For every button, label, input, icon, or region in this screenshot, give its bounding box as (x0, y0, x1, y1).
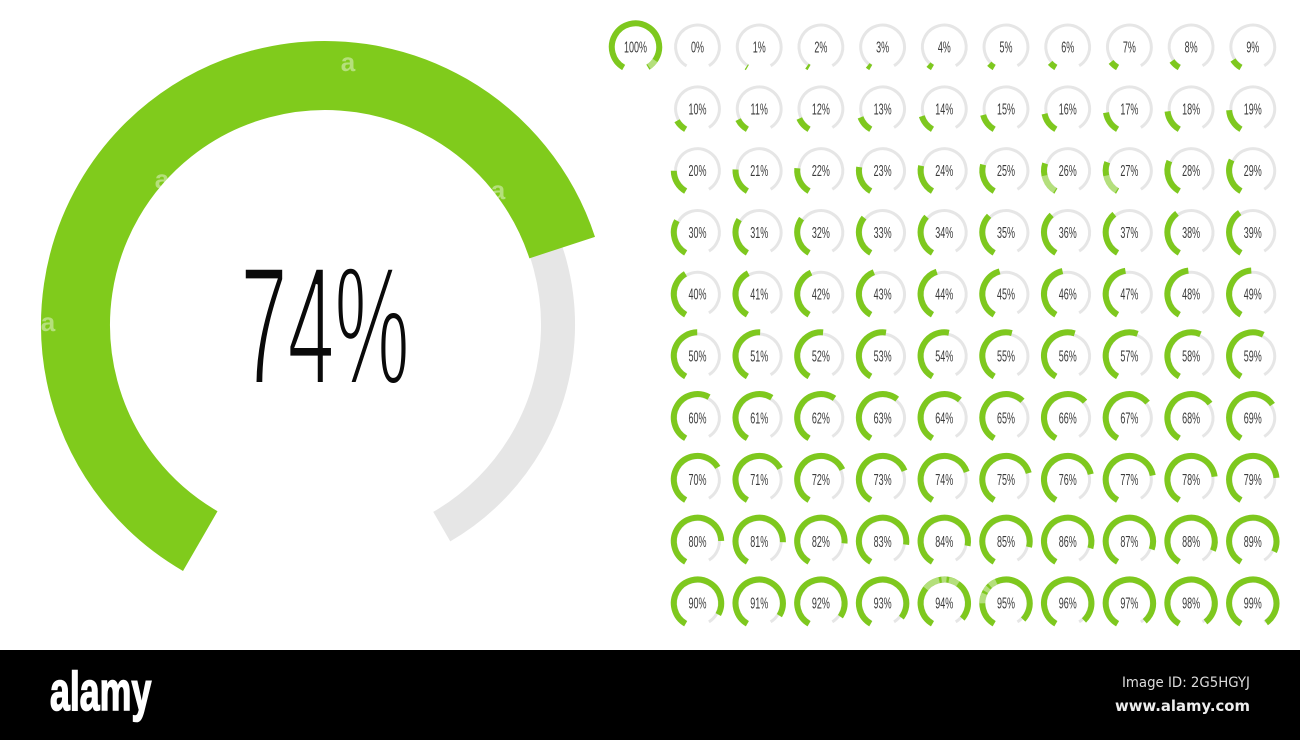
gauge: 74%: 74% (935, 472, 953, 489)
gauge: 39%: 39% (1244, 224, 1262, 242)
main gauge: 74%: a (155, 164, 170, 194)
gauge: 50%: 50% (689, 348, 706, 365)
gauge: 60% (665, 385, 730, 450)
gauge: 63% (850, 385, 915, 450)
gauge: 54% (912, 324, 977, 388)
main gauge: 74%: a (491, 175, 506, 205)
gauge: 26%: 26% (1059, 163, 1077, 180)
gauge: 51% (727, 324, 792, 388)
gauge: 97%: 97% (1120, 595, 1138, 612)
gauge: 35%: 35% (997, 224, 1015, 242)
gauge: 17%: 17% (1120, 101, 1138, 118)
gauge: 98% (1159, 571, 1223, 636)
gauge: 5% (974, 15, 1038, 79)
gauge: 25%: 25% (997, 163, 1015, 180)
gauge: 77% (1097, 447, 1162, 512)
gauge: 69%: 69% (1244, 410, 1262, 427)
gauge: 80%: 80% (689, 533, 706, 551)
gauge: 22%: 22% (812, 163, 830, 180)
gauge: 34%: 34% (935, 224, 953, 242)
gauge: 90% (665, 571, 730, 636)
gauge: 55%: 55% (997, 348, 1015, 365)
gauge: 7% (1097, 15, 1162, 79)
gauge: 4%: 4% (938, 39, 951, 56)
gauge: 35% (974, 200, 1038, 265)
gauge: 72%: 72% (812, 472, 830, 489)
image id: Image ID: 2G5HGYJ (1122, 675, 1250, 691)
gauge: 39% (1220, 200, 1285, 265)
gauge: 49% (1220, 262, 1285, 327)
gauge: 12%: 12% (812, 101, 830, 118)
gauge: 56%: 56% (1059, 348, 1077, 365)
gauge: 80% (665, 509, 730, 574)
gauge: 94% (912, 571, 977, 636)
gauge: 58% (1159, 324, 1223, 388)
gauge: 92% (789, 571, 853, 636)
gauge: 91% (727, 571, 792, 636)
gauge: 79% (1220, 447, 1285, 512)
gauge: 30% (665, 200, 730, 265)
gauge: 33%: 33% (874, 224, 892, 242)
gauge: 75% (974, 447, 1038, 512)
gauge: 19% (1220, 76, 1285, 141)
gauge: 45% (974, 262, 1038, 327)
gauge: 53% (850, 324, 915, 388)
gauge: 72% (789, 447, 853, 512)
gauge: 66% (1035, 385, 1100, 450)
gauge: 6%: 6% (1061, 39, 1074, 56)
gauge: 94%: 94% (935, 595, 953, 612)
gauge: 90%: 90% (689, 595, 706, 612)
main gauge: 74%: a (41, 307, 56, 337)
main gauge: 74% (0, 0, 666, 666)
alamy logo: alamy (50, 660, 152, 722)
gauge: 87%: 87% (1120, 533, 1138, 551)
gauge: 98%: 98% (1182, 595, 1200, 612)
gauge: 23% (850, 138, 915, 203)
gauge: 2%: 2% (814, 39, 827, 56)
gauge: 9% (1220, 15, 1285, 79)
main gauge: 74%: a (341, 47, 356, 77)
gauge: 83%: 83% (874, 533, 892, 551)
gauge: 75%: 75% (997, 472, 1015, 489)
gauge: 15% (974, 76, 1038, 141)
footer bar (0, 650, 1300, 740)
gauge: 70%: 70% (689, 472, 706, 489)
gauge: 15%: 15% (997, 101, 1015, 118)
gauge: 29%: 29% (1244, 163, 1262, 180)
gauge: 2% (789, 15, 853, 79)
gauge: 44% (912, 262, 977, 327)
gauge: 63%: 63% (874, 410, 892, 427)
gauge: 18%: 18% (1182, 101, 1200, 118)
gauge: 73%: 73% (874, 472, 892, 489)
gauge: 82%: 82% (812, 533, 830, 551)
gauge: 67% (1097, 385, 1162, 450)
gauge: 66%: 66% (1059, 410, 1077, 427)
gauge: 88% (1159, 509, 1223, 574)
gauge: 68% (1159, 385, 1223, 450)
gauge: 74% (912, 447, 977, 512)
gauge: 96%: 96% (1059, 595, 1077, 612)
gauge: 32% (789, 200, 853, 265)
gauge: 89% (1220, 509, 1285, 574)
gauge: 61% (727, 385, 792, 450)
gauge: 61%: 61% (750, 410, 768, 427)
gauge: 48%: 48% (1182, 286, 1200, 303)
gauge: 91%: 91% (750, 595, 768, 612)
gauge: 95% (974, 571, 1038, 636)
gauge: 36% (1035, 200, 1100, 265)
gauge: 52% (789, 324, 853, 388)
gauge: 13%: 13% (874, 101, 892, 118)
gauge: 46% (1035, 262, 1100, 327)
gauge: 78%: 78% (1182, 472, 1200, 489)
gauge: 100% (603, 15, 668, 79)
gauge: 69% (1220, 385, 1285, 450)
gauge: 11% (727, 76, 792, 141)
gauge: 38%: 38% (1182, 224, 1200, 242)
gauge: 85%: 85% (997, 533, 1015, 551)
gauge: 19%: 19% (1244, 101, 1262, 118)
gauge: 9%: 9% (1246, 39, 1259, 56)
gauge: 0% (668, 17, 727, 77)
gauge: 41% (727, 262, 792, 327)
gauge: 64%: 64% (935, 410, 953, 427)
gauge: 43%: 43% (874, 286, 892, 303)
gauge: 48% (1159, 262, 1223, 327)
gauge: 40% (665, 262, 730, 327)
gauge: 60%: 60% (689, 410, 706, 427)
gauge: 25% (974, 138, 1038, 203)
gauge: 45%: 45% (997, 286, 1015, 303)
gauge: 99% (1220, 571, 1285, 636)
gauge: 21%: 21% (750, 163, 768, 180)
gauge: 86%: 86% (1059, 533, 1077, 551)
gauge: 40%: 40% (689, 286, 706, 303)
gauge: 28% (1159, 138, 1223, 203)
gauge: 53%: 53% (874, 348, 892, 365)
gauge: 31%: 31% (750, 224, 768, 242)
gauge: 12% (789, 76, 853, 141)
gauge: 88%: 88% (1182, 533, 1200, 551)
gauge: 50% (665, 324, 730, 388)
gauge: 42% (789, 262, 853, 327)
gauge: 8%: 8% (1185, 39, 1198, 56)
gauge: 10%: 10% (689, 101, 706, 118)
gauge: 23%: 23% (874, 163, 892, 180)
gauge: 18% (1159, 76, 1223, 141)
gauge: 86% (1035, 509, 1100, 574)
gauge: 57% (1097, 324, 1162, 388)
gauge: 73% (850, 447, 915, 512)
gauge: 10% (665, 76, 730, 141)
gauge: 3% (850, 15, 915, 79)
gauge: 62% (789, 385, 853, 450)
gauge: 5%: 5% (1000, 39, 1012, 56)
gauge: 59%: 59% (1244, 348, 1262, 365)
gauge: 47%: 47% (1120, 286, 1138, 303)
gauge: 14%: 14% (935, 101, 953, 118)
gauge: 93% (850, 571, 915, 636)
gauge: 65% (974, 385, 1038, 450)
gauge: 44%: 44% (935, 286, 953, 303)
gauge: 55% (974, 324, 1038, 388)
gauge: 22% (789, 138, 853, 203)
gauge: 76% (1035, 447, 1100, 512)
gauge: 85% (974, 509, 1038, 574)
gauge: 54%: 54% (935, 348, 953, 365)
gauge: 34% (912, 200, 977, 265)
gauge: 24%: 24% (935, 163, 953, 180)
gauge: 20% (665, 138, 730, 203)
gauge: 83% (850, 509, 915, 574)
gauge: 16% (1035, 76, 1100, 141)
gauge: 31% (727, 200, 792, 265)
gauge: 42%: 42% (812, 286, 830, 303)
gauge: 47% (1097, 262, 1162, 327)
gauge: 38% (1159, 200, 1223, 265)
gauge: 71%: 71% (750, 472, 768, 489)
gauge: 79%: 79% (1244, 472, 1262, 489)
gauge: 71% (727, 447, 792, 512)
gauge: 11%: 11% (751, 101, 768, 118)
gauge: 81%: 81% (750, 533, 768, 551)
gauge: 33% (850, 200, 915, 265)
gauge: 21% (727, 138, 792, 203)
gauge: 89%: 89% (1244, 533, 1262, 551)
gauge: 16%: 16% (1059, 101, 1077, 118)
gauge: 70% (665, 447, 730, 512)
gauge: 0%: 0% (691, 39, 704, 56)
gauge: 43% (850, 262, 915, 327)
gauge: 37%: 37% (1120, 224, 1138, 242)
gauge: 82% (789, 509, 853, 574)
gauge: 28%: 28% (1182, 163, 1200, 180)
gauge: 27%: 27% (1120, 163, 1138, 180)
gauge: 95%: 95% (997, 595, 1015, 612)
gauge: 32%: 32% (812, 224, 830, 242)
gauge: 30%: 30% (689, 224, 706, 242)
website: www.alamy.com (1115, 697, 1250, 715)
gauge: 1% (727, 15, 792, 79)
gauge: 36%: 36% (1059, 224, 1077, 242)
gauge: 97% (1097, 571, 1162, 636)
main gauge: 74%: 74% (240, 232, 410, 421)
gauge: 1%: 1% (753, 39, 766, 56)
gauge: 77%: 77% (1120, 472, 1138, 489)
gauge: 96% (1035, 571, 1100, 636)
gauge: 81% (727, 509, 792, 574)
gauge: 92%: 92% (812, 595, 830, 612)
gauge: 27% (1097, 138, 1162, 203)
gauge: 84% (912, 509, 977, 574)
gauge: 67%: 67% (1120, 410, 1138, 427)
gauge: 14% (912, 76, 977, 141)
gauge: 51%: 51% (750, 348, 768, 365)
gauge: 68%: 68% (1182, 410, 1200, 427)
gauge: 8% (1159, 15, 1223, 79)
gauge: 100%: 100% (624, 39, 647, 56)
gauge: 99%: 99% (1244, 595, 1262, 612)
gauge: 84%: 84% (935, 533, 953, 551)
gauge: 41%: 41% (750, 286, 768, 303)
gauge: 52%: 52% (812, 348, 830, 365)
gauge: 59% (1220, 324, 1285, 388)
gauge: 20%: 20% (689, 163, 706, 180)
gauge: 93%: 93% (874, 595, 892, 612)
gauge: 64% (912, 385, 977, 450)
gauge: 76%: 76% (1059, 472, 1077, 489)
gauge: 4% (912, 15, 977, 79)
gauge: 57%: 57% (1120, 348, 1138, 365)
gauge: 87% (1097, 509, 1162, 574)
gauge: 26% (1035, 138, 1100, 203)
gauge: 49%: 49% (1244, 286, 1262, 303)
gauge: 3%: 3% (876, 39, 889, 56)
gauge: 37% (1097, 200, 1162, 265)
gauge: 7%: 7% (1123, 39, 1136, 56)
gauge: 56% (1035, 324, 1100, 388)
gauge: 29% (1220, 138, 1285, 203)
gauge: 24% (912, 138, 977, 203)
gauge: 17% (1097, 76, 1162, 141)
gauge: 78% (1159, 447, 1223, 512)
gauge: 62%: 62% (812, 410, 830, 427)
gauge: 58%: 58% (1182, 348, 1200, 365)
gauge: 65%: 65% (997, 410, 1015, 427)
gauge: 46%: 46% (1059, 286, 1077, 303)
gauge: 6% (1035, 15, 1100, 79)
gauge: 13% (850, 76, 915, 141)
